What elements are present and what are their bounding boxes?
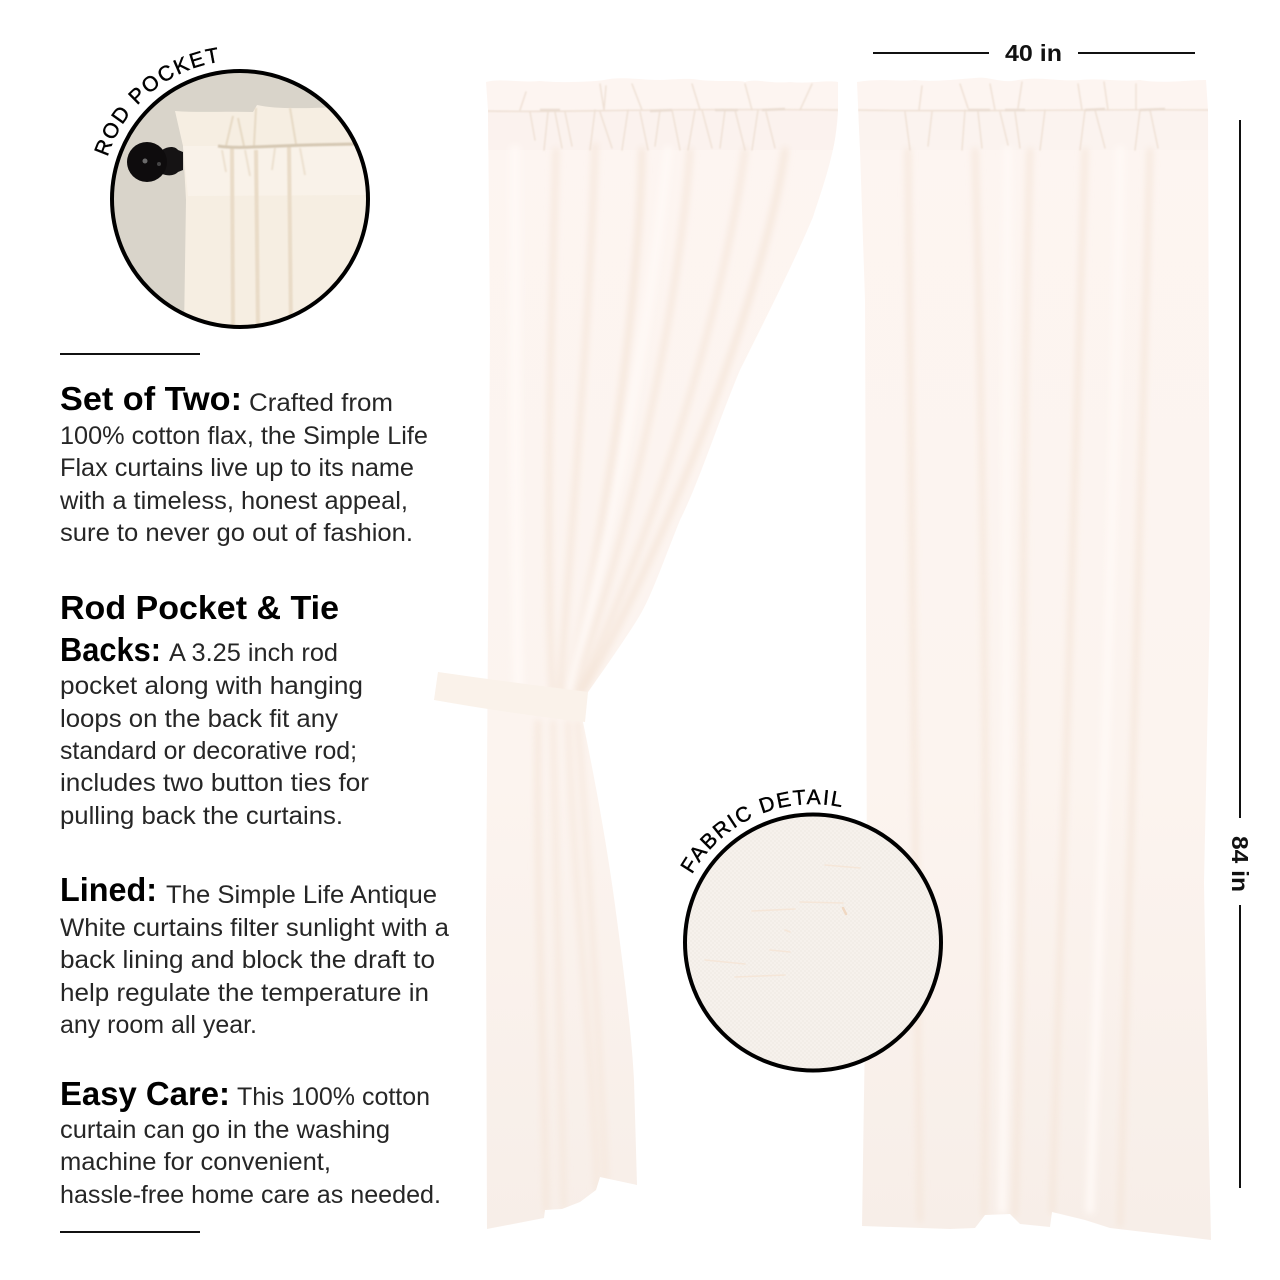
panel: left curtain, tied back	[434, 70, 850, 1240]
text block: easy care: hassle-free home care as needed.	[60, 1181, 441, 1209]
text block: rod pocket and tie backs: pocket along with hanging	[60, 672, 363, 700]
text block: set of two: Set of Two:	[60, 380, 242, 417]
icon: fabric detail circle	[680, 810, 950, 1080]
text block: set of two: Flax curtains live up to its name	[60, 454, 414, 482]
text block: lined: Lined:	[60, 871, 157, 908]
text block: rod pocket and tie backs	[60, 589, 369, 830]
text block: lined	[60, 871, 449, 1039]
text block: easy care: machine for convenient,	[60, 1148, 331, 1176]
text block: easy care: Easy Care:	[60, 1075, 230, 1112]
text block: set of two: sure to never go out of fashion.	[60, 519, 413, 547]
panel: right curtain, straight	[850, 70, 1220, 1250]
text block: lined: The Simple Life Antique	[166, 881, 437, 909]
text block: easy care: curtain can go in the washing	[60, 1116, 390, 1144]
label: fabric detail: FABRIC DETAIL	[680, 789, 842, 874]
width dimension: 40 in: 40 in	[1005, 40, 1062, 66]
text block: rod pocket and tie backs: A 3.25 inch rod	[169, 639, 338, 667]
text block: set of two: with a timeless, honest appeal,	[59, 487, 408, 515]
text block: rod pocket and tie backs: Rod Pocket & Tie	[60, 589, 339, 626]
height dimension: 84 in: 84 in	[1227, 836, 1253, 892]
text block: rod pocket and tie backs: loops on the back fit any	[60, 705, 339, 733]
text block: easy care: This 100% cotton	[237, 1083, 430, 1111]
divider: top	[60, 353, 200, 355]
icon: rod pocket detail circle	[110, 70, 370, 330]
text block: lined: White curtains filter sunlight with a	[60, 914, 449, 942]
text block: set of two	[59, 380, 428, 547]
text block: set of two: 100% cotton flax, the Simple Life	[60, 422, 428, 450]
label: rod pocket: ROD POCKET	[94, 47, 218, 156]
divider: bottom	[60, 1231, 200, 1233]
text block: rod pocket and tie backs: standard or decorative rod;	[60, 737, 357, 765]
text block: set of two: Crafted from	[249, 389, 393, 417]
icon: black rod finial	[127, 142, 183, 182]
text block: rod pocket and tie backs: pulling back the curtains.	[60, 802, 343, 830]
icon: tie back strap	[434, 672, 588, 722]
text block: rod pocket and tie backs: Backs:	[60, 631, 161, 668]
text block: easy care	[60, 1075, 441, 1209]
text block: lined: help regulate the temperature in	[60, 979, 429, 1007]
text block: rod pocket and tie backs: includes two button ties for	[60, 769, 369, 797]
text block: lined: any room all year.	[60, 1011, 257, 1039]
text block: lined: back lining and block the draft to	[60, 946, 435, 974]
